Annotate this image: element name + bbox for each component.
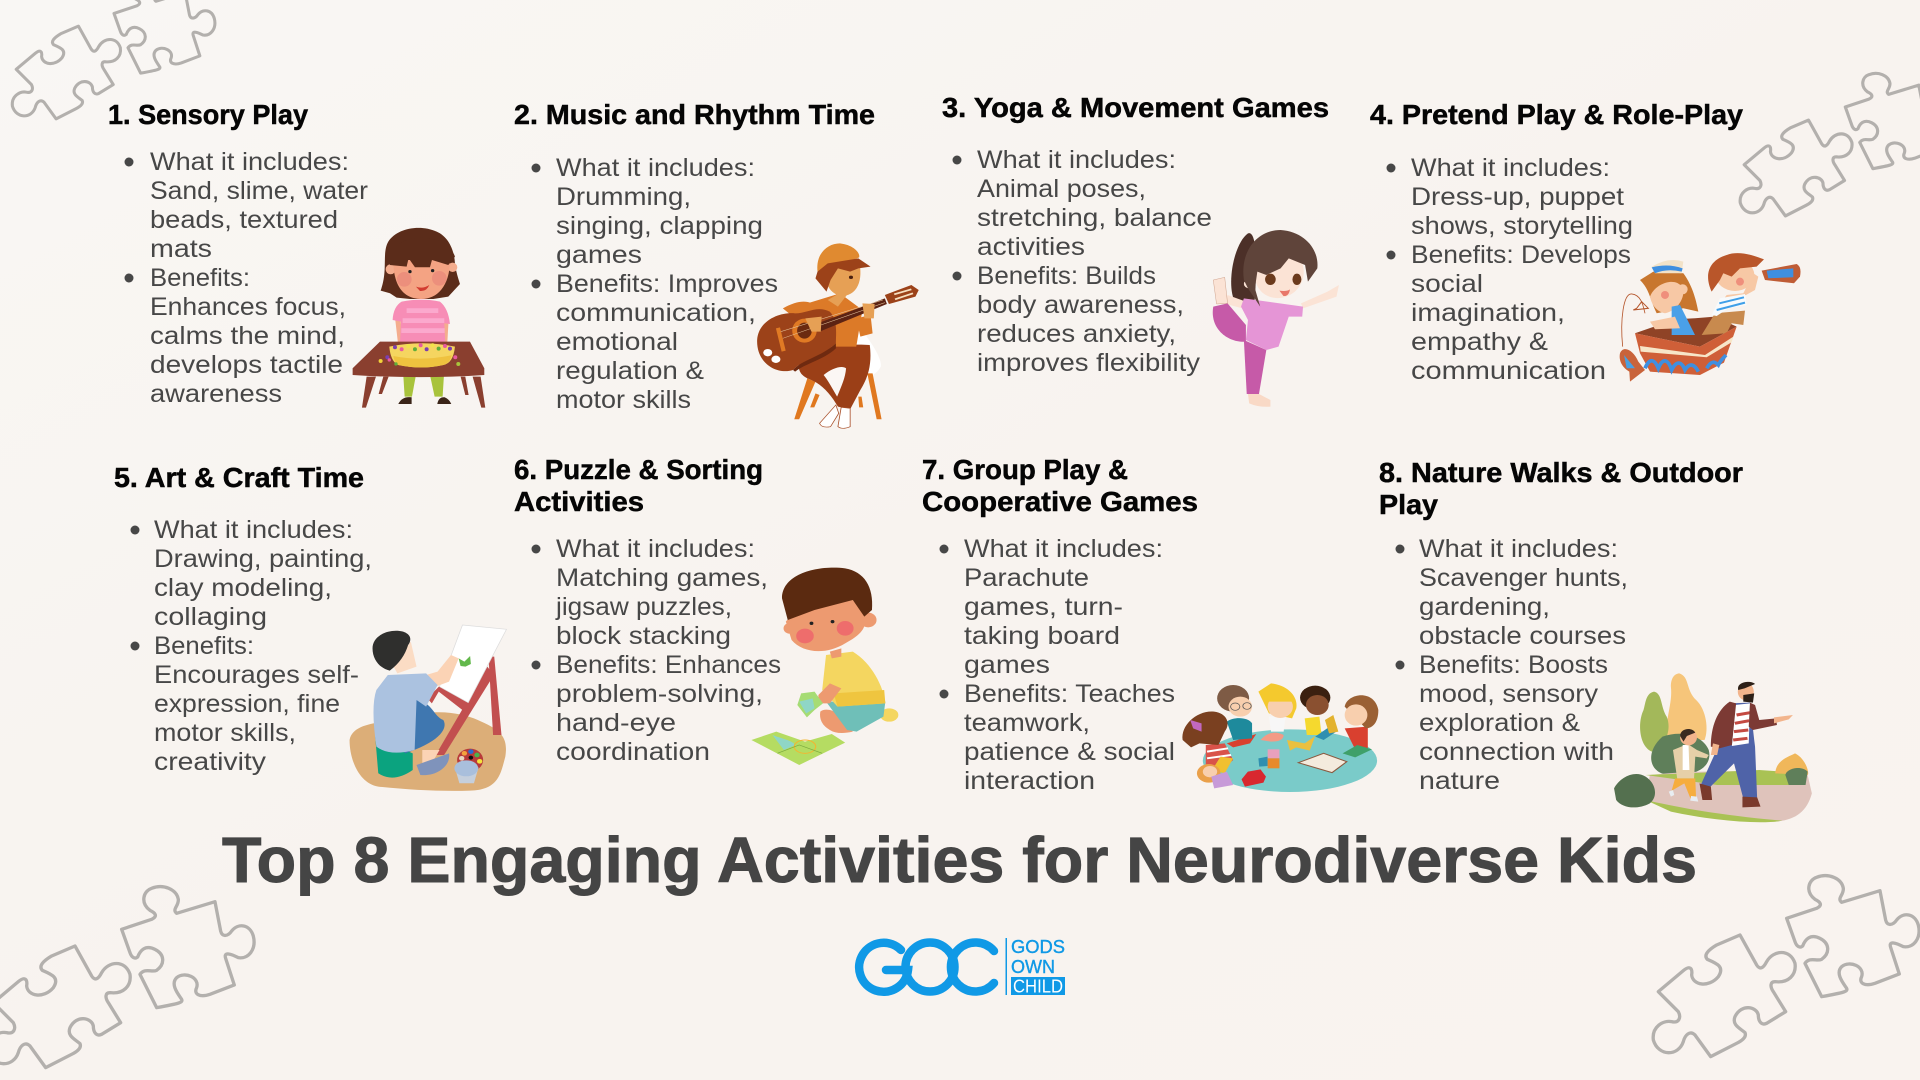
panel: 6 puzzle and sorting — [514, 454, 898, 766]
text block 7: games, turn- — [964, 593, 1123, 621]
text block 3: Benefits: Builds — [977, 262, 1156, 290]
text block 6: Benefits: Enhances — [556, 651, 781, 679]
text block 4: social — [1411, 270, 1483, 298]
text block 3: activities — [977, 233, 1085, 261]
icon: girl in yoga pose — [1213, 230, 1339, 407]
text block 6: problem-solving, — [556, 680, 763, 708]
text block 2: Drumming, — [556, 183, 691, 211]
text block 1: Enhances focus, — [150, 293, 346, 321]
text block 2: Benefits: Improves — [556, 270, 778, 298]
text block 3: reduces anxiety, — [977, 320, 1176, 348]
text block 3: body awareness, — [977, 291, 1184, 319]
panel: 7 group play — [922, 454, 1378, 795]
text block 5: What it includes: — [154, 516, 353, 544]
panel: 2 music and rhythm — [514, 99, 919, 428]
text block 8: obstacle courses — [1419, 622, 1626, 650]
text block 2: motor skills — [556, 386, 691, 414]
text block 8: nature — [1419, 767, 1500, 795]
text block 1: develops tactile — [150, 351, 343, 379]
text block 7: Benefits: Teaches — [964, 680, 1175, 708]
text block 2: singing, clapping — [556, 212, 763, 240]
text block 7: What it includes: — [964, 535, 1163, 563]
logo: Gods Own Child: GODS — [1011, 937, 1065, 957]
text block 7: games — [964, 651, 1050, 679]
puzzle pieces: top left — [12, 0, 215, 119]
text block 2: games — [556, 241, 642, 269]
text block 3: What it includes: — [977, 146, 1176, 174]
text block 1: Benefits: — [150, 264, 250, 292]
heading 2: 2. Music and Rhythm Time — [514, 99, 875, 130]
text block 4: What it includes: — [1411, 154, 1610, 182]
text block 6: coordination — [556, 738, 710, 766]
heading 6: 6. Puzzle & Sorting — [514, 454, 763, 485]
text block 2: emotional — [556, 328, 678, 356]
text block 6: Matching games, — [556, 564, 768, 592]
icon: boy playing guitar — [757, 243, 919, 428]
puzzle pieces: bottom left — [0, 887, 254, 1068]
text block 5: Drawing, painting, — [154, 545, 372, 573]
heading 6: Activities — [514, 486, 644, 517]
heading 1: 1. Sensory Play — [108, 99, 308, 130]
heading 8: Play — [1379, 489, 1438, 520]
text block 4: Benefits: Develops — [1411, 241, 1631, 269]
text block 3 — [952, 146, 1212, 377]
text block 7: Parachute — [964, 564, 1089, 592]
text block 5: expression, fine — [154, 690, 340, 718]
panel: 8 nature walks — [1379, 457, 1812, 822]
text block 5: motor skills, — [154, 719, 296, 747]
text block 1: mats — [150, 235, 212, 263]
text block 3: improves flexibility — [977, 349, 1201, 377]
title: Top 8 Engaging Activities for Neurodiverse Kids — [222, 824, 1697, 896]
text block 8: What it includes: — [1419, 535, 1618, 563]
text block 4 — [1386, 154, 1633, 385]
text block 5: clay modeling, — [154, 574, 332, 602]
text block 4: shows, storytelling — [1411, 212, 1633, 240]
text block 8: connection with — [1419, 738, 1614, 766]
text block 6: jigsaw puzzles, — [555, 593, 732, 621]
text block 5: creativity — [154, 748, 267, 776]
icon: children playing on a mat — [1182, 683, 1378, 792]
heading 8 — [1379, 457, 1743, 520]
text block 5: Encourages self- — [154, 661, 359, 689]
panel: 3 yoga and movement — [942, 92, 1339, 407]
icon: child painting at easel — [350, 625, 506, 791]
text block 1: calms the mind, — [150, 322, 345, 350]
text block 5: collaging — [154, 603, 267, 631]
logo: Gods Own Child: CHILD — [1013, 976, 1063, 996]
text block 8: Scavenger hunts, — [1419, 564, 1628, 592]
text block 1: beads, textured — [150, 206, 338, 234]
logo: Gods Own Child: OWN — [1011, 957, 1055, 977]
icon: boy doing jigsaw puzzle — [751, 568, 898, 765]
puzzle pieces: top right — [1740, 73, 1920, 216]
text block 7: patience & social — [964, 738, 1175, 766]
icon: girl at sensory table — [353, 228, 485, 408]
text block 2: What it includes: — [556, 154, 755, 182]
heading 7: 7. Group Play & — [922, 454, 1128, 485]
text block 8 — [1396, 535, 1628, 795]
text block 6: hand-eye — [556, 709, 676, 737]
panel: 5 art and craft — [114, 462, 506, 791]
heading 7: Cooperative Games — [922, 486, 1198, 517]
text block 6: What it includes: — [556, 535, 755, 563]
panel: 1 sensory play — [108, 99, 485, 408]
text block 1: awareness — [150, 380, 282, 408]
heading 8: 8. Nature Walks & Outdoor — [1379, 457, 1743, 488]
heading 3: 3. Yoga & Movement Games — [942, 92, 1329, 123]
panel: 4 pretend play — [1370, 99, 1801, 385]
text block 4: Dress-up, puppet — [1411, 183, 1624, 211]
text block 5 — [130, 516, 372, 776]
text block 8: gardening, — [1419, 593, 1550, 621]
text block 6 — [532, 535, 781, 766]
text block 5: Benefits: — [154, 632, 254, 660]
text block 2: communication, — [556, 299, 756, 327]
text block 3: stretching, balance — [977, 204, 1212, 232]
heading 7 — [922, 454, 1198, 517]
text block 7: taking board — [964, 622, 1120, 650]
text block 2: regulation & — [556, 357, 704, 385]
text block 2 — [532, 154, 778, 414]
heading 5: 5. Art & Craft Time — [114, 462, 364, 493]
heading 4: 4. Pretend Play & Role-Play — [1370, 99, 1743, 130]
text block 4: imagination, — [1411, 299, 1565, 327]
text block 6: block stacking — [556, 622, 731, 650]
icon: parent and child on nature walk — [1614, 673, 1812, 822]
text block 3: Animal poses, — [977, 175, 1146, 203]
puzzle pieces: bottom right — [1653, 876, 1919, 1057]
text block 7 — [940, 535, 1175, 795]
text block 1 — [124, 148, 368, 408]
text block 1: What it includes: — [150, 148, 349, 176]
text block 4: communication — [1411, 357, 1606, 385]
text block 7: interaction — [964, 767, 1095, 795]
text block 8: exploration & — [1419, 709, 1580, 737]
logo: Gods Own Child — [859, 937, 1065, 996]
text block 4: empathy & — [1411, 328, 1548, 356]
text block 7: teamwork, — [964, 709, 1090, 737]
text block 1: Sand, slime, water — [150, 177, 368, 205]
heading 6 — [514, 454, 763, 517]
text block 8: Benefits: Boosts — [1419, 651, 1608, 679]
icon: children in a toy boat — [1620, 253, 1801, 382]
text block 8: mood, sensory — [1419, 680, 1599, 708]
